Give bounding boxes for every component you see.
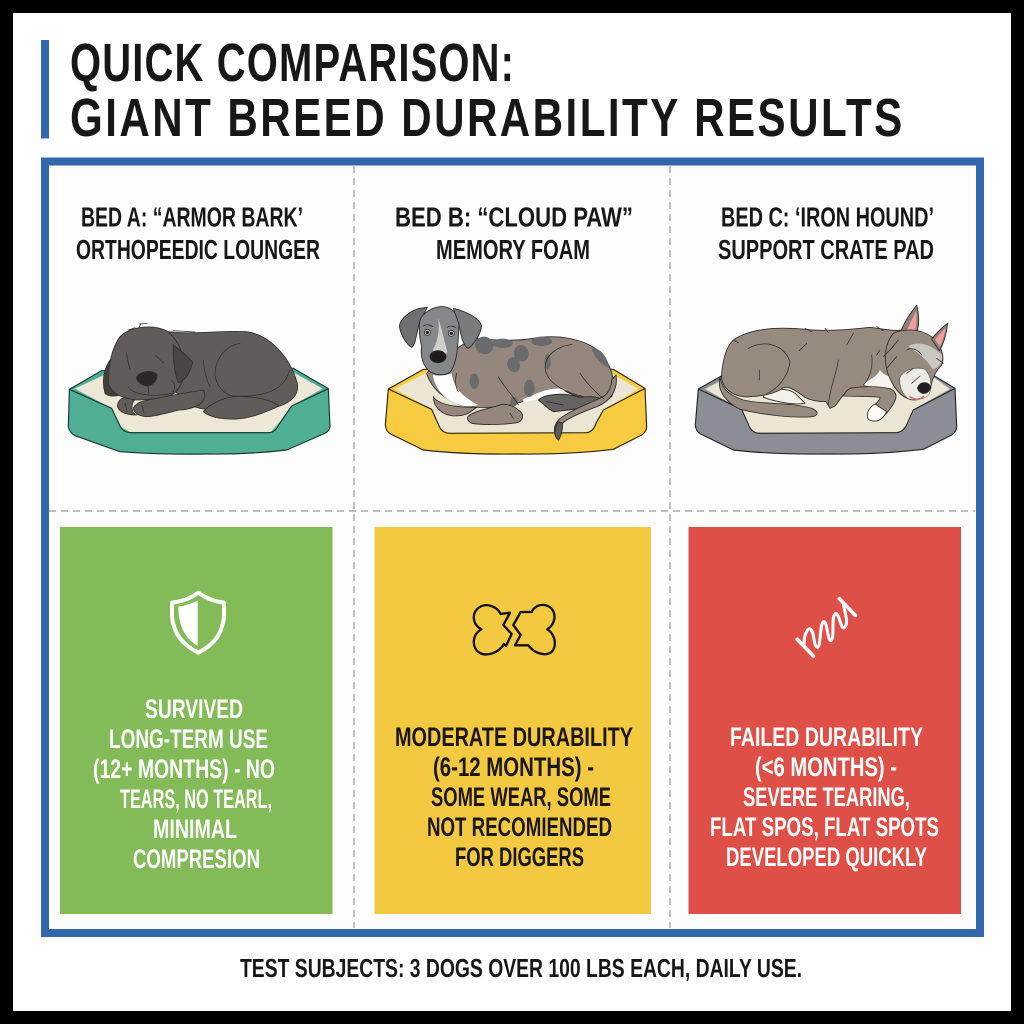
heading: Bed B: MEMORY FOAM — [436, 234, 590, 265]
title — [70, 33, 902, 148]
result text: (6-12 MONTHS) - — [433, 752, 594, 782]
title: QUICK COMPARISON: — [70, 33, 514, 94]
card: Bed A result — [60, 527, 332, 914]
result text: FAILED DURABILITY — [730, 722, 923, 752]
illustration: Bed B with merle great dane — [385, 307, 647, 454]
result text: LONG-TERM USE — [109, 724, 268, 754]
comparison panel frame — [45, 162, 980, 933]
result text: SEVERE TEARING, — [743, 782, 910, 812]
grey merle dog — [399, 307, 616, 440]
heading: Bed C: BED C: ‘IRON HOUND’ — [721, 202, 934, 232]
result text — [710, 722, 939, 872]
result text: MINIMAL — [153, 814, 237, 844]
result text: DEVELOPED QUICKLY — [726, 842, 927, 872]
result text — [93, 694, 275, 874]
scruffy dog — [719, 305, 948, 421]
result text: TEARS, NO TEARL, — [120, 784, 272, 814]
result text: COMPRESION — [133, 844, 260, 874]
title: GIANT BREED DURABILITY RESULTS — [70, 88, 902, 148]
result text: (<6 MONTHS) - — [755, 752, 897, 782]
heading: Bed A: ORTHOPEEDIC LOUNGER — [76, 234, 320, 265]
illustration: Bed A with sleeping dark dog — [68, 323, 330, 454]
heading: Bed A — [76, 202, 320, 265]
heading: Bed A: BED A: “ARMOR BARK’ — [81, 202, 303, 232]
grey bed back and cushion — [695, 369, 957, 454]
illustration: Bed C with scruffy grey dog — [695, 305, 957, 454]
heading: Bed B: BED B: “CLOUD PAW” — [395, 202, 633, 232]
result text — [395, 722, 633, 872]
icon: broken bone — [474, 605, 555, 654]
yellow bed back and cushion — [385, 369, 647, 454]
result text: MODERATE DURABILITY — [395, 722, 633, 752]
icon: flattened spring — [797, 599, 855, 656]
heading: Bed C — [718, 202, 934, 265]
card: Bed C result — [688, 527, 961, 914]
heading: Bed B — [395, 202, 633, 265]
title accent bar — [41, 40, 49, 138]
result text: SURVIVED — [145, 694, 243, 724]
teal bed back and cushion — [68, 368, 330, 454]
result text: NOT RECOMIENDED — [427, 812, 612, 842]
footer note: TEST SUBJECTS: 3 DOGS OVER 100 LBS EACH, DAILY USE. — [240, 953, 802, 983]
result text: FOR DIGGERS — [455, 842, 584, 872]
heading: Bed C: SUPPORT CRATE PAD — [718, 234, 934, 265]
dark dog — [103, 323, 298, 419]
result text: SOME WEAR, SOME — [431, 782, 611, 812]
icon: shield — [172, 593, 224, 653]
result text: (12+ MONTHS) - NO — [93, 754, 275, 784]
card: Bed B result — [374, 527, 651, 914]
